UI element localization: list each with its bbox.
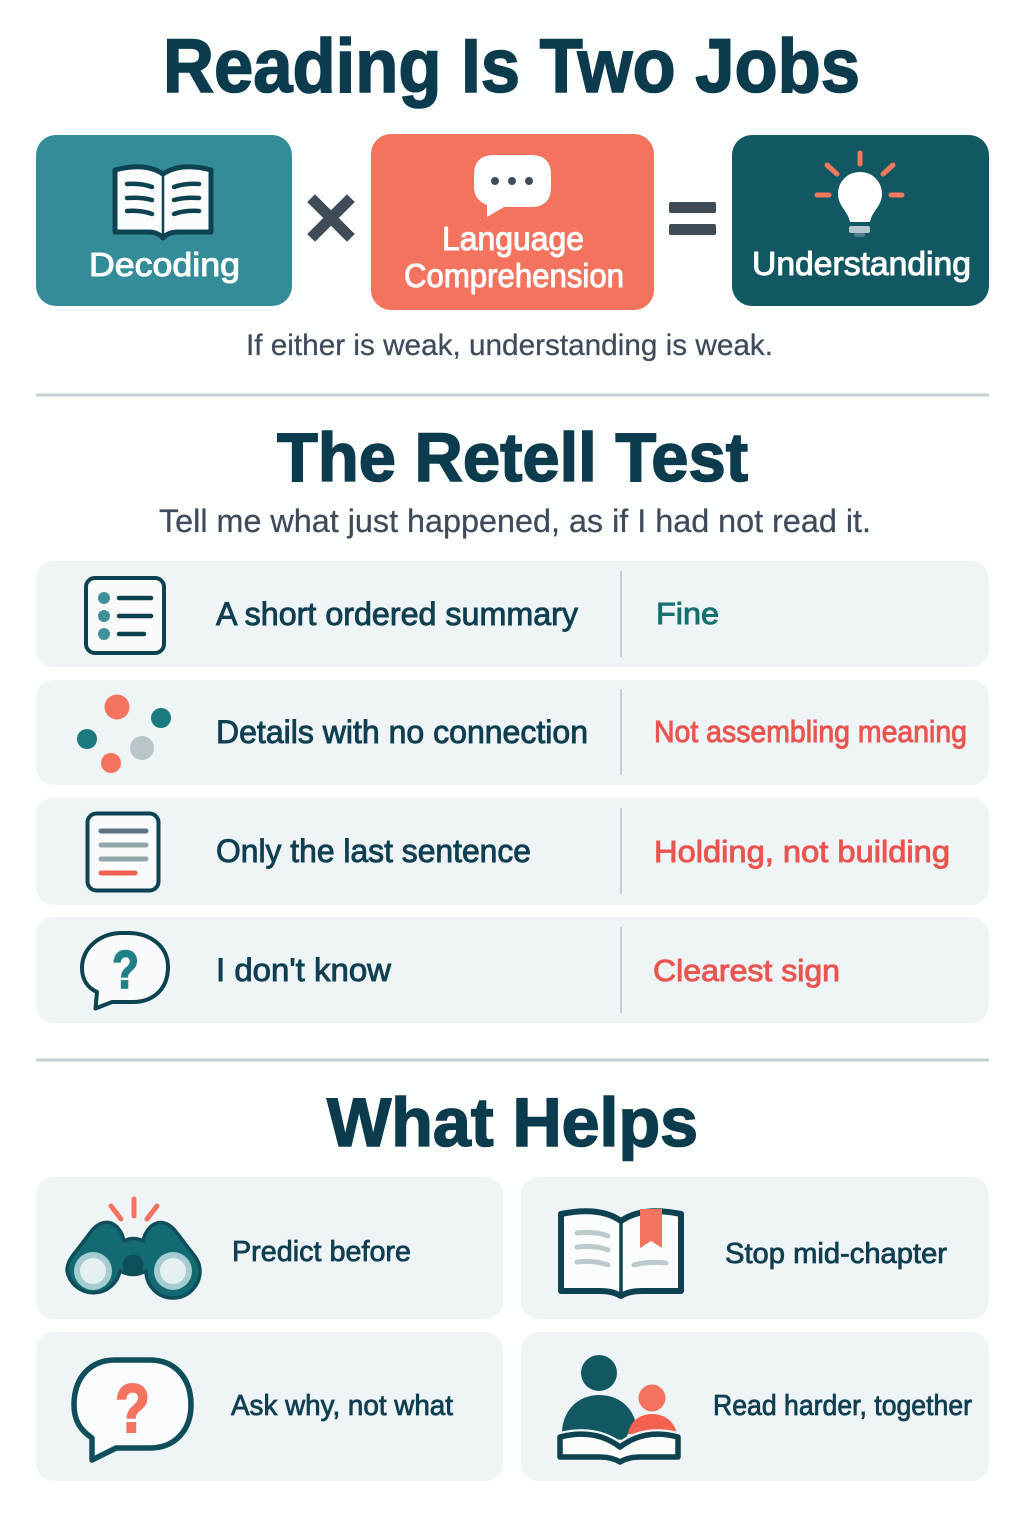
card: read harder together	[521, 1332, 989, 1481]
label: decoding: Decoding	[89, 246, 240, 283]
heading: the retell test: The Retell Test	[277, 419, 748, 496]
icon: question bubble	[82, 933, 168, 1008]
heading: what helps: What Helps	[327, 1084, 698, 1161]
label: language comprehension	[404, 220, 624, 294]
title: Reading Is Two Jobs	[163, 24, 860, 109]
panel: language comprehension	[371, 134, 654, 310]
text: retell prompt: Tell me what just happened, as if I had not read it.	[159, 503, 871, 539]
text: caption: If either is weak, understanding is weak.	[246, 329, 773, 362]
label: language comprehension: Language	[442, 220, 584, 257]
label: read harder together: Read harder, together	[713, 1390, 972, 1422]
icon: scattered dots	[77, 694, 171, 773]
label: understanding: Understanding	[752, 245, 971, 282]
label: ordered summary: A short ordered summary	[216, 596, 578, 632]
card: stop mid-chapter	[521, 1177, 989, 1319]
icon: large question bubble	[74, 1360, 191, 1460]
verdict: not assembling meaning: Not assembling meaning	[654, 714, 967, 749]
icon: large question bubble: ?	[115, 1370, 150, 1447]
icon: equals sign	[669, 202, 716, 235]
icon: book with bookmark	[561, 1209, 681, 1296]
verdict: fine: Fine	[656, 596, 719, 631]
row: ordered summary	[36, 561, 989, 667]
icon: adult and child reading	[560, 1355, 678, 1462]
icon: document	[88, 814, 158, 890]
icon: light bulb	[817, 153, 902, 237]
icon: multiply sign	[315, 202, 347, 234]
card: predict before	[36, 1177, 503, 1319]
icon: binoculars	[67, 1199, 200, 1298]
row: details with no connection	[36, 680, 989, 785]
icon: open book	[115, 167, 211, 238]
panel: decoding	[36, 135, 292, 306]
card: ask why	[36, 1332, 503, 1481]
row: i don't know	[36, 917, 989, 1023]
label: stop mid-chapter: Stop mid-chapter	[725, 1238, 947, 1270]
verdict: holding: Holding, not building	[654, 834, 950, 869]
row: last sentence	[36, 798, 989, 905]
label: language comprehension: Comprehension	[404, 257, 624, 294]
label: last sentence: Only the last sentence	[216, 833, 531, 869]
label: details: Details with no connection	[216, 714, 588, 750]
icon: list	[86, 578, 164, 653]
label: i don't know: I don't know	[216, 952, 392, 988]
verdict: clearest sign: Clearest sign	[653, 953, 840, 988]
panel: understanding	[732, 135, 989, 306]
icon: speech bubble	[474, 155, 551, 217]
icon: question bubble: ?	[112, 940, 139, 1000]
label: ask why: Ask why, not what	[231, 1390, 453, 1422]
label: predict before: Predict before	[232, 1236, 411, 1268]
